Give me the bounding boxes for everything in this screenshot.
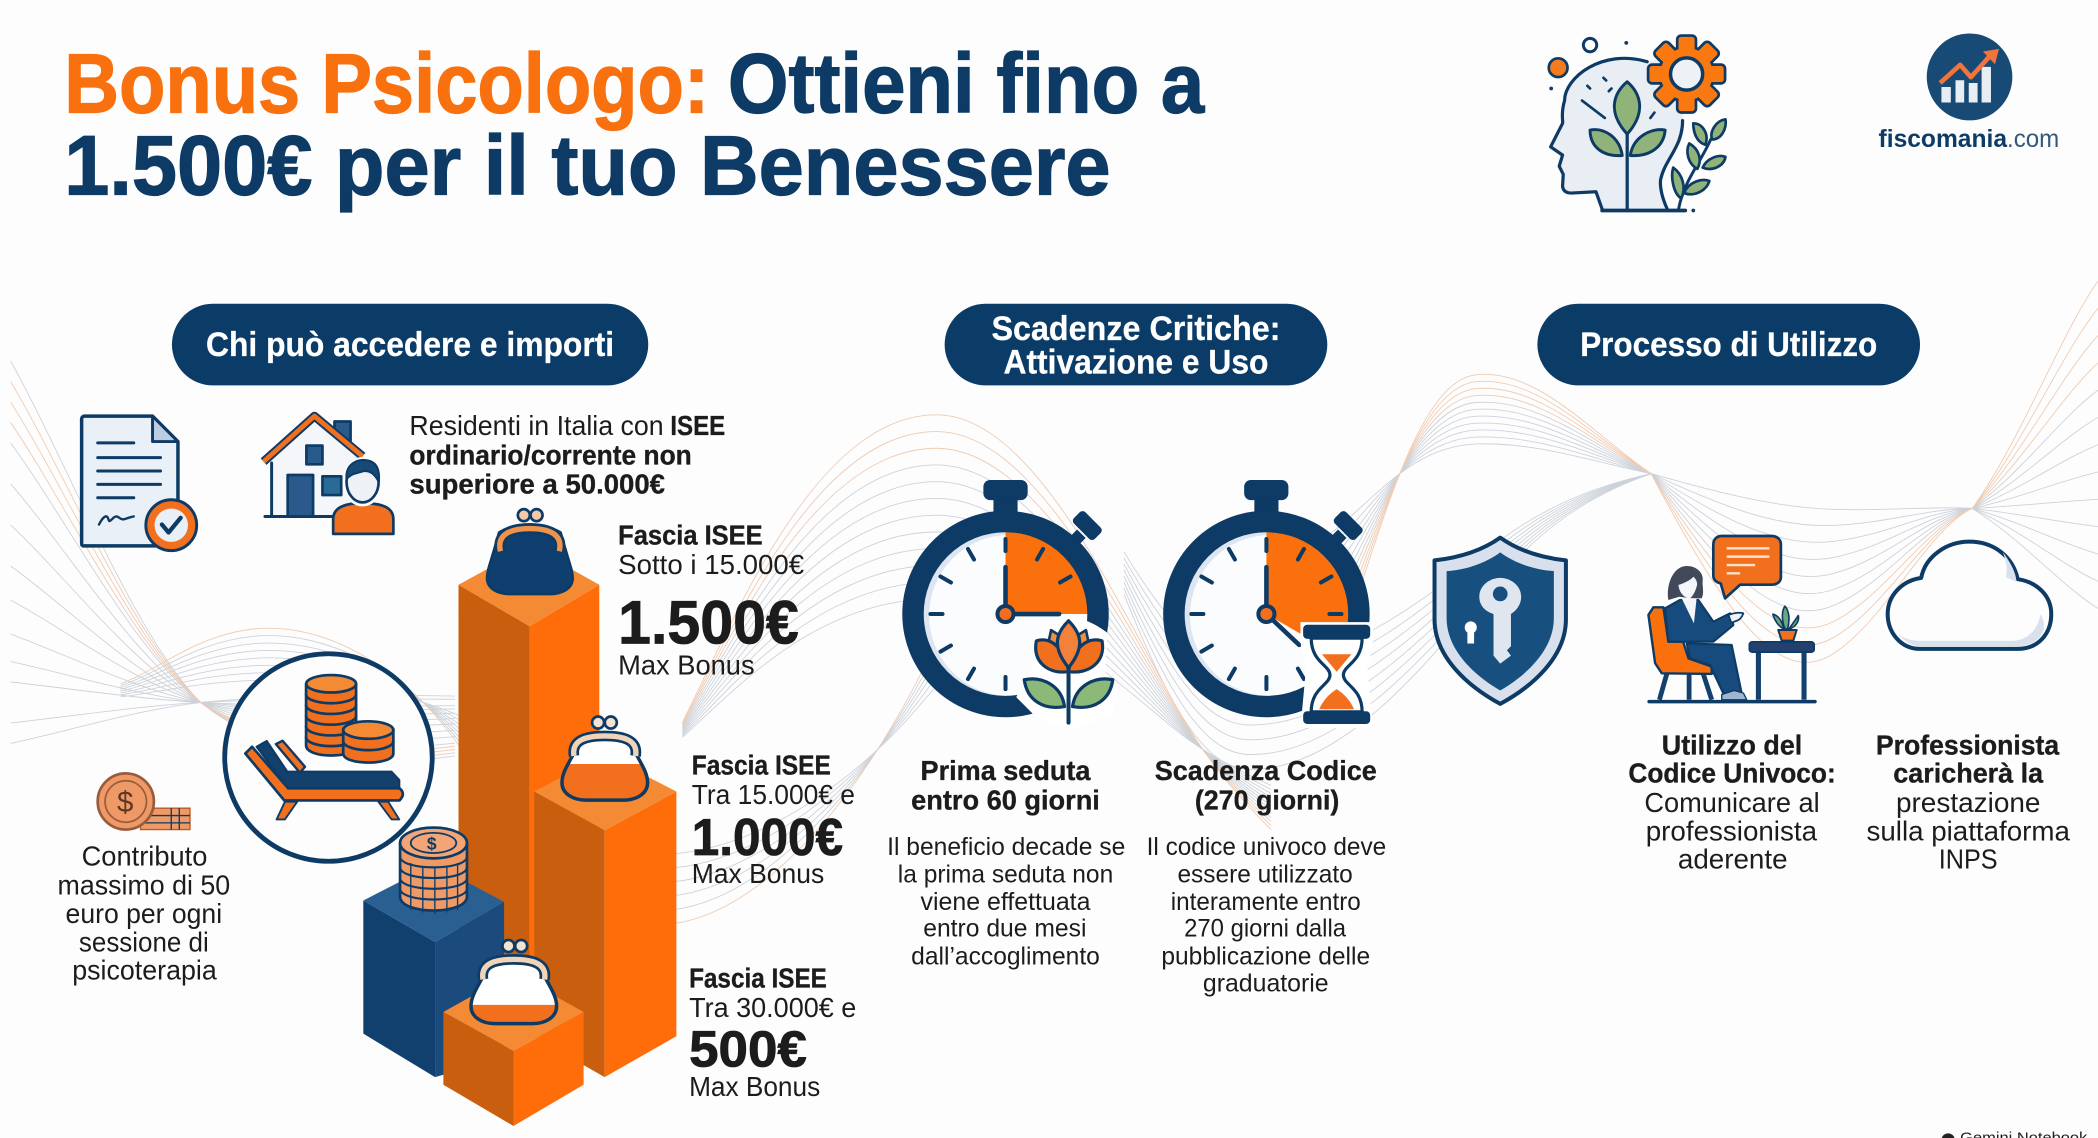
text: professionista (1867, 730, 2070, 874)
text: scadenza codice: essere utilizzato (1177, 860, 1353, 888)
text: utilizzo del codice (1628, 730, 1836, 874)
text: utilizzo del codice: Codice Univoco: (1628, 758, 1836, 789)
icon: coin and roll: $ (117, 786, 133, 819)
bar: 1.500 euro (459, 546, 599, 1017)
title: Bonus Psicologo: (64, 37, 709, 131)
text: residenti: superiore a 50.000€ (409, 469, 665, 500)
icon: coin and roll (98, 773, 190, 830)
text: fascia 1.000: Fascia ISEE (692, 750, 831, 781)
hourglass (1300, 622, 1373, 728)
text: contributo massimo: massimo di 50 (58, 869, 230, 900)
icon: low purse (471, 940, 557, 1024)
icon: woman at table with speech bubble (1648, 536, 1815, 702)
text: scadenza codice: 270 giorni dalla (1184, 915, 1347, 943)
lounger (245, 741, 403, 819)
text: prima seduta: dall’accoglimento (911, 943, 1100, 971)
text: contributo massimo: sessione di (79, 926, 209, 957)
logo text: .com (2007, 125, 2059, 153)
icon: head with plant and gear (1549, 37, 1726, 212)
text: fascia 500: Max Bonus (689, 1071, 820, 1102)
text: fascia 1.000: Tra 15.000€ e (692, 779, 855, 810)
text: scadenza codice: graduatorie (1203, 969, 1329, 997)
icon: stopwatch with flower (913, 480, 1118, 729)
text: fascia 1.500: Sotto i 15.000€ (618, 549, 805, 580)
text: scadenza codice: interamente entro (1171, 888, 1361, 916)
title: Ottieni fino a (728, 37, 1205, 131)
text: prima seduta: Il beneficio decade se (887, 833, 1125, 861)
bar: 1.000 euro (534, 755, 676, 1077)
text: fascia 500: 500€ (689, 1020, 807, 1077)
text: prima seduta: viene effettuata (921, 888, 1091, 916)
title (64, 37, 1205, 213)
logo mark (1927, 33, 2012, 120)
text: utilizzo del codice: Utilizzo del (1662, 730, 1802, 761)
flower (1016, 618, 1118, 729)
text: prima seduta (887, 755, 1125, 971)
icon: lounger and coins circle (225, 654, 432, 861)
heading: processo di utilizzo: Processo di Utilizzo (1580, 326, 1877, 364)
text: prima seduta: la prima seduta non (898, 860, 1113, 888)
text: contributo massimo: Contributo (82, 841, 207, 872)
logo: fiscomania (1879, 33, 2059, 153)
text: scadenza codice: Il codice univoco deve (1147, 833, 1386, 861)
text: professionista: INPS (1939, 843, 1998, 874)
bar chart: isometric ISEE bars (363, 546, 676, 1126)
text: utilizzo del codice: aderente (1678, 843, 1788, 874)
speech bubble (1713, 536, 1781, 598)
text: scadenza codice (1147, 755, 1386, 997)
text: residenti: ordinario/corrente non (409, 439, 692, 470)
text: scadenza codice: pubblicazione delle (1161, 943, 1370, 971)
bar: blue coins (363, 864, 504, 1077)
heading: processo di utilizzo (1537, 304, 1920, 385)
text: prima seduta: entro due mesi (923, 915, 1086, 943)
text: residenti: Residenti in Italia con (409, 410, 664, 441)
heading: chi può accedere (172, 304, 648, 385)
heading: scadenze critiche (945, 304, 1327, 385)
icon: stopwatch with hourglass (1174, 480, 1373, 728)
icon: house and person (264, 416, 393, 534)
icon: half purse (562, 717, 648, 800)
logo text: fiscomania (1879, 125, 2008, 153)
heading: scadenze critiche: Attivazione e Uso (1004, 343, 1268, 381)
text: fascia 500 (689, 962, 856, 1102)
text: fascia 1.500: Fascia ISEE (618, 520, 763, 551)
heading: scadenze critiche: Scadenze Critiche: (991, 310, 1280, 348)
coin stack small (343, 721, 393, 763)
text: professionista: sulla piattaforma (1867, 815, 2070, 846)
text: fascia 500: Tra 30.000€ e (689, 992, 856, 1023)
coin stack large (306, 675, 356, 755)
icon: coin stack: $ (427, 834, 437, 854)
text: utilizzo del codice: professionista (1646, 815, 1817, 846)
text: fascia 1.500: 1.500€ (618, 589, 799, 658)
text: fascia 1.500 (618, 520, 805, 680)
text: contributo massimo (58, 841, 230, 985)
text: scadenza codice: Scadenza Codice (1155, 755, 1377, 786)
icon: coin stack (400, 828, 467, 914)
chair (1648, 607, 1712, 700)
text: fascia 1.500: Max Bonus (618, 649, 755, 680)
text: residenti (409, 410, 725, 500)
title: 1.500€ per il tuo Benessere (64, 119, 1111, 213)
icon: signed document (82, 416, 197, 551)
icon: cloud (1888, 542, 2051, 649)
icon: full navy purse (487, 509, 573, 594)
text: professionista: caricherà la (1893, 758, 2044, 789)
text: contributo massimo: euro per ogni (66, 898, 222, 929)
text: prima seduta: entro 60 giorni (911, 785, 1100, 816)
table and plant (1749, 606, 1814, 700)
text: fascia 1.000: 1.000€ (692, 809, 843, 867)
text: prima seduta: Prima seduta (921, 755, 1091, 786)
text: professionista: Professionista (1876, 730, 2060, 761)
text: scadenza codice: (270 giorni) (1195, 785, 1339, 816)
text: residenti: ISEE (670, 410, 725, 441)
text: professionista: prestazione (1896, 787, 2040, 818)
text: fascia 1.000: Max Bonus (692, 858, 824, 889)
text: fascia 1.000 (692, 750, 855, 889)
icon: shield with key (1435, 538, 1566, 704)
bar: 500 euro (443, 973, 584, 1126)
text: utilizzo del codice: Comunicare al (1644, 787, 1820, 818)
text: contributo massimo: psicoterapia (72, 954, 217, 985)
heading: chi può accedere: Chi può accedere e importi (206, 326, 614, 364)
person (1665, 566, 1747, 700)
text: fascia 500: Fascia ISEE (689, 962, 827, 993)
